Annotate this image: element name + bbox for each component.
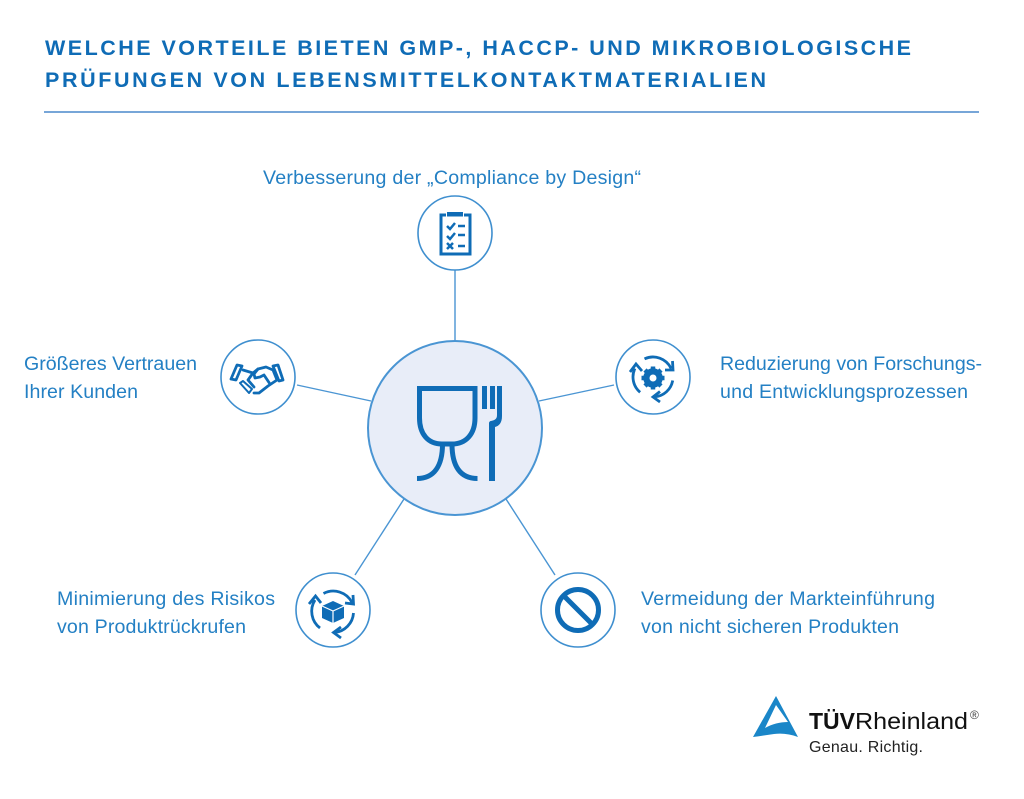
bottom-left benefit xyxy=(57,573,370,647)
label xyxy=(720,353,982,403)
right benefit xyxy=(616,340,982,414)
icon: box with cycle arrows xyxy=(309,591,354,638)
logo: TÜV Rheinland: Rheinland xyxy=(855,708,968,734)
logo: TÜV Rheinland: ® xyxy=(970,708,979,722)
label xyxy=(24,353,197,403)
label: von Produktrückrufen xyxy=(57,616,246,638)
top benefit xyxy=(263,167,641,270)
icon: fork xyxy=(482,386,502,481)
left benefit xyxy=(24,340,295,414)
label: Minimierung des Risikos xyxy=(57,588,275,610)
title: PRÜFUNGEN VON LEBENSMITTELKONTAKTMATERIALIEN xyxy=(45,67,766,92)
label: Vermeidung der Markteinführung xyxy=(641,588,935,610)
label: von nicht sicheren Produkten xyxy=(641,616,899,638)
label xyxy=(641,588,935,638)
logo: TÜV Rheinland xyxy=(753,696,979,756)
icon: glass xyxy=(417,388,478,478)
label: Größeres Vertrauen xyxy=(24,353,197,375)
central circle with food-safe icon xyxy=(368,341,542,515)
bottom-right benefit xyxy=(541,573,935,647)
label xyxy=(57,588,275,638)
logo: TÜV Rheinland: TÜV xyxy=(809,708,856,734)
title: WELCHE VORTEILE BIETEN GMP-, HACCP- UND MIKROBIOLOGISCHE xyxy=(45,36,911,60)
icon: gear with cycle arrows xyxy=(630,357,673,402)
icon: prohibition sign xyxy=(558,590,598,630)
logo: TÜV Rheinland: Genau. Richtig. xyxy=(809,739,923,756)
label: und Entwicklungsprozessen xyxy=(720,381,968,403)
label: Reduzierung von Forschungs- xyxy=(720,353,982,375)
label: Verbesserung der „Compliance by Design“ xyxy=(263,167,641,189)
icon: checklist xyxy=(441,212,470,254)
label: Ihrer Kunden xyxy=(24,381,138,403)
icon: handshake xyxy=(231,365,283,393)
icon: logo triangle xyxy=(753,696,798,737)
title xyxy=(45,36,911,92)
